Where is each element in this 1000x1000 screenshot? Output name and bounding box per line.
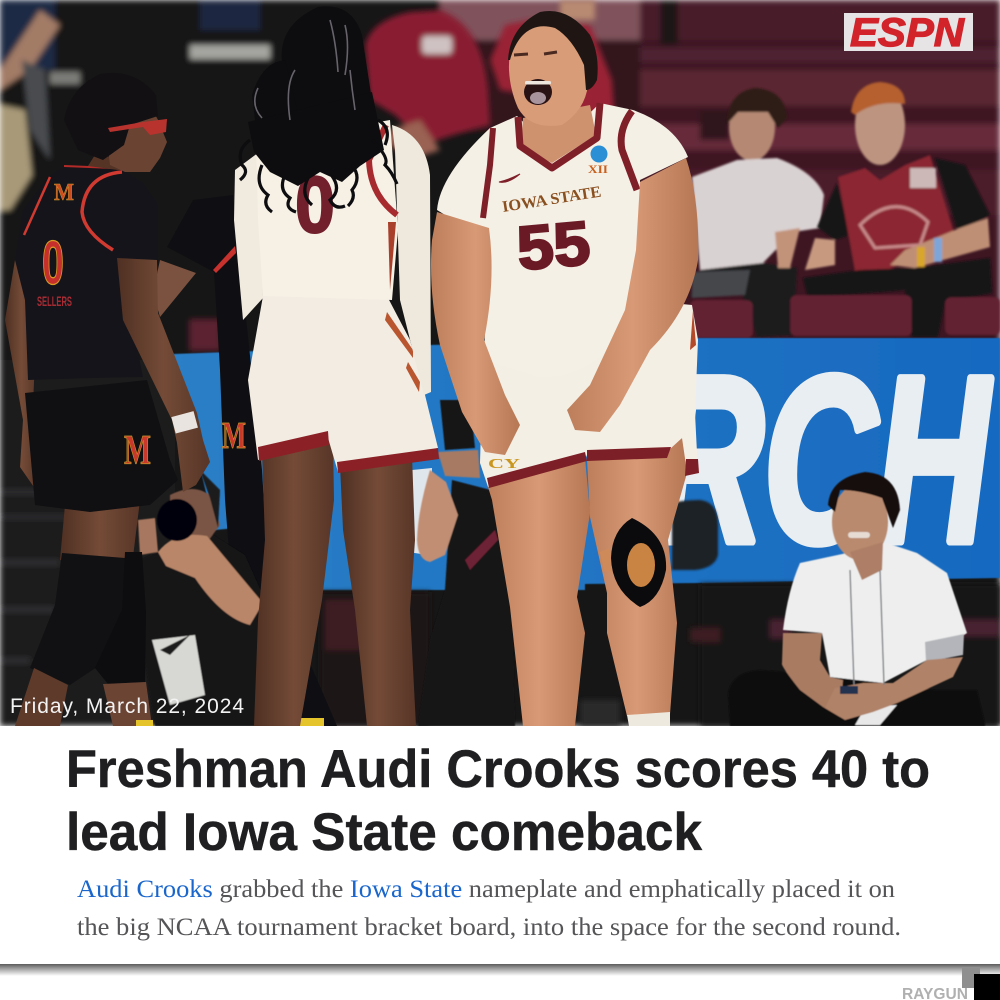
pulled-back hair — [508, 11, 598, 90]
Maryland M shorts logo: M — [222, 415, 246, 457]
headline: lead Iowa State comeback — [66, 803, 703, 862]
jersey — [15, 260, 142, 380]
arena background: stands and seating — [0, 0, 1000, 726]
shorts — [248, 296, 438, 472]
maroon V collar — [518, 103, 600, 168]
neck and head — [88, 156, 120, 170]
man seated courtside in white polo — [728, 472, 985, 726]
left arm — [5, 260, 34, 486]
photo: arena scene with players — [0, 0, 1000, 726]
fan: red vest and orange cap — [803, 82, 992, 337]
long white undershirt arms — [234, 150, 263, 320]
open mouth — [524, 79, 552, 105]
shorts M logo: M — [124, 428, 151, 474]
Big 12 badge: XII — [588, 162, 608, 176]
player: Maryland number 0 — [5, 73, 210, 726]
footer divider shadow — [0, 964, 1000, 976]
banner: blue March Madness signage — [173, 328, 1000, 592]
jersey number: 0 — [42, 229, 64, 298]
equipment bag beside knee — [672, 500, 718, 570]
jersey wordmark: IOWA STATE — [501, 184, 602, 216]
summary text — [77, 876, 901, 941]
shorts — [480, 300, 698, 487]
eyes — [514, 52, 557, 55]
braided hair — [79, 83, 156, 160]
arms — [782, 633, 843, 717]
courtside maroon seats — [690, 295, 1000, 338]
red sport glasses — [108, 119, 167, 135]
Cyclones shorts logo: CY — [488, 457, 520, 472]
player: Maryland teammate behind, black kit — [153, 195, 337, 726]
dark hair — [828, 472, 900, 528]
left leg — [60, 506, 140, 560]
left arm — [431, 212, 520, 455]
dark floor area below banner — [320, 584, 1000, 726]
headline — [66, 740, 930, 862]
player: Iowa State number 55 — [431, 11, 699, 726]
summary text: Audi Crooks grabbed the Iowa State nameplate and emphatically placed it on — [77, 876, 896, 903]
jersey number: 55 — [514, 209, 593, 284]
fan: white t-shirt — [690, 88, 824, 337]
footer corner marks — [962, 968, 1000, 1000]
jersey — [437, 103, 688, 377]
photographer: centre — [417, 400, 515, 726]
braided and curly hair — [240, 6, 397, 212]
photographer: left — [138, 470, 265, 726]
right arm — [117, 258, 210, 492]
logo: ESPN: ESPN — [850, 11, 965, 55]
fan: red sweatshirt — [365, 0, 615, 160]
right arm — [567, 158, 698, 432]
jersey name: SELLERS — [37, 293, 72, 309]
black shorts — [25, 380, 178, 512]
maroon arm trim — [483, 128, 493, 218]
icon: black knee tape — [600, 518, 666, 607]
icon: Nike swoosh — [499, 174, 520, 182]
player: Iowa State teammate, back view — [234, 6, 439, 726]
jersey M logo: M — [54, 180, 74, 206]
headline: Freshman Audi Crooks scores 40 to — [66, 740, 930, 799]
maroon shorts trim — [487, 452, 587, 488]
right thigh and calf — [587, 438, 687, 716]
white polo — [783, 543, 967, 683]
lanyard — [850, 570, 884, 685]
jersey back — [256, 120, 398, 300]
date overlay: Friday, March 22, 2024 — [10, 695, 244, 718]
icon: NCAA badge — [590, 146, 608, 162]
white sock — [627, 712, 670, 726]
head — [509, 25, 588, 126]
neck — [521, 105, 596, 163]
face — [832, 484, 888, 560]
summary text: the big NCAA tournament bracket board, into the space for the second round. — [77, 914, 901, 941]
left thigh and calf — [488, 458, 590, 726]
jersey number: 0 — [295, 160, 335, 249]
legs — [254, 440, 334, 726]
